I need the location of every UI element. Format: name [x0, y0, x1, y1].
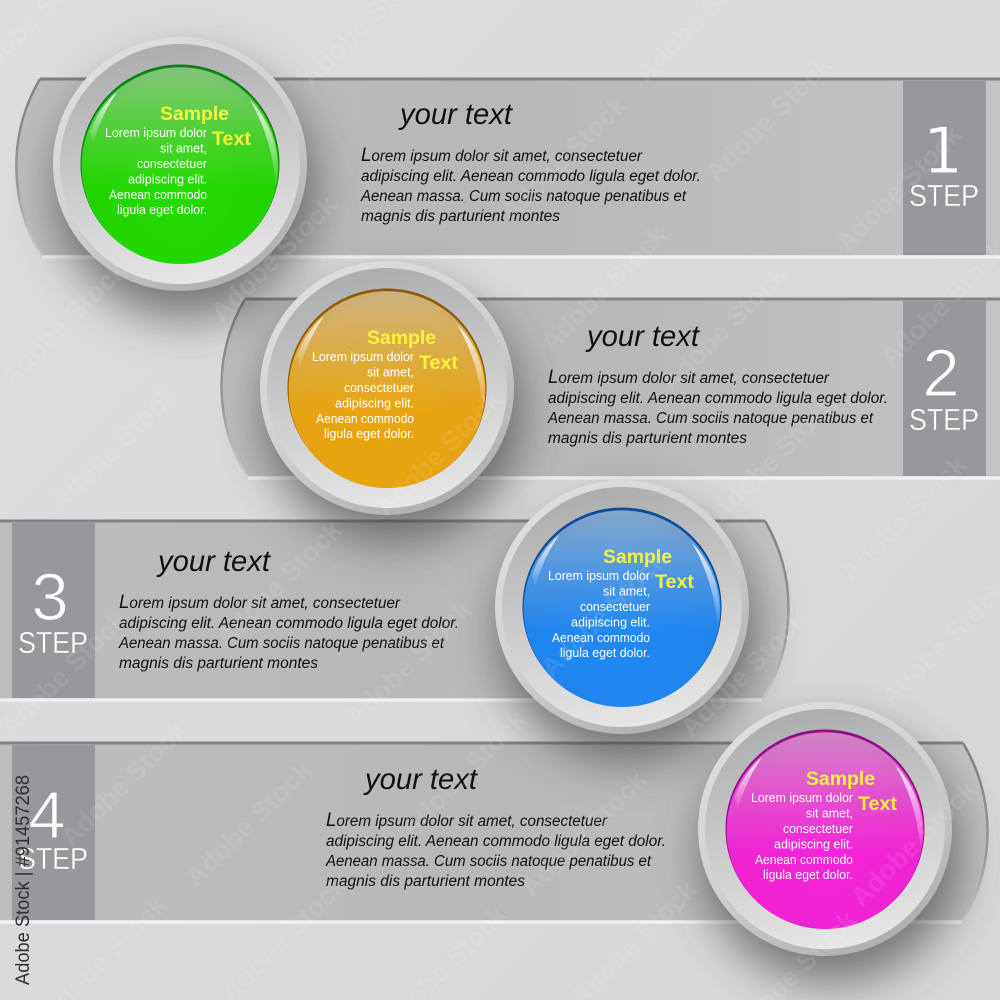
- text block 2: Lorem ipsum dolor sit amet, consectetuer: [548, 367, 830, 388]
- text block 4: Aenean massa. Cum sociis natoque penatibus et: [325, 853, 652, 870]
- stock watermarks: Adobe Stock: [205, 189, 343, 328]
- text block 1: magnis dis parturient montes: [361, 208, 560, 225]
- magenta glass button: consectetuer: [783, 821, 854, 836]
- blue glass button: Aenean commodo: [552, 630, 650, 645]
- orange glass button: Aenean commodo: [316, 411, 414, 426]
- stock watermarks: Adobe Stock: [700, 49, 838, 188]
- text block 1: Aenean massa. Cum sociis natoque penatibus et: [360, 188, 687, 205]
- green glass button: Text: [212, 129, 252, 150]
- text block 4: magnis dis parturient montes: [326, 873, 525, 890]
- blue glass button: Lorem ipsum dolor: [548, 568, 651, 583]
- stock watermarks: Adobe Stock: [210, 514, 348, 653]
- stock watermarks: Adobe Stock: [495, 89, 633, 228]
- text block 2: adipiscing elit. Aenean commodo ligula eget dolor.: [548, 390, 888, 407]
- stock watermarks: Adobe Stock: [370, 384, 508, 523]
- blue glass button: adipiscing elit.: [571, 614, 650, 630]
- stock watermarks: Adobe Stock: [675, 604, 813, 743]
- stock id caption: Adobe Stock | #91457268: [13, 775, 34, 985]
- blue glass button: sit amet,: [603, 584, 650, 598]
- step 3 label: [18, 560, 88, 660]
- step 4 label: STEP: [18, 841, 88, 876]
- text block 3: Aenean massa. Cum sociis natoque penatibus et: [118, 635, 445, 652]
- step 3 label: 3: [31, 560, 69, 635]
- text block 2: Aenean massa. Cum sociis natoque penatibus et: [547, 410, 874, 427]
- stock watermarks: Adobe Stock: [515, 764, 653, 903]
- orange glass button: ligula eget dolor.: [324, 426, 414, 441]
- stock watermarks: Adobe Stock: [340, 594, 478, 733]
- text block 4: your text: [363, 763, 479, 796]
- step 4 label: 4: [28, 778, 66, 853]
- magenta glass button: Text: [858, 794, 898, 815]
- magenta glass button: Sample: [806, 769, 875, 790]
- text block 4: adipiscing elit. Aenean commodo ligula eget dolor.: [326, 833, 666, 850]
- stock watermarks: Adobe Stock: [845, 774, 983, 913]
- blue glass button: Text: [655, 572, 695, 593]
- step 2 label: [909, 336, 979, 437]
- text block 2: [547, 320, 888, 447]
- step 2 label: 2: [922, 336, 960, 411]
- text block 3: magnis dis parturient montes: [119, 655, 318, 672]
- stock watermarks: Adobe Stock: [395, 704, 533, 843]
- orange glass button: sit amet,: [367, 364, 414, 380]
- stock watermarks: Adobe Stock: [835, 449, 973, 588]
- green glass button: Lorem ipsum dolor: [105, 125, 208, 140]
- blue glass button: ligula eget dolor.: [560, 645, 650, 660]
- step 4 label: [18, 778, 88, 876]
- band 3: [0, 521, 788, 700]
- orange glass button: Lorem ipsum dolor: [312, 349, 415, 364]
- text block 1: your text: [398, 98, 514, 131]
- blue glass button: consectetuer: [580, 599, 651, 614]
- stock watermarks: Adobe Stock: [830, 119, 968, 258]
- band 4: [0, 743, 987, 922]
- stock watermarks: Adobe Stock: [535, 219, 673, 358]
- magenta glass button: adipiscing elit.: [774, 836, 853, 852]
- stock watermarks: Adobe Stock: [705, 389, 843, 528]
- green glass button: sit amet,: [160, 140, 207, 156]
- magenta glass button: Lorem ipsum dolor: [751, 790, 854, 805]
- orange glass button: Text: [419, 353, 459, 374]
- step 1 label: STEP: [909, 178, 979, 213]
- stock watermarks: Adobe Stock: [55, 714, 193, 853]
- text block 3: adipiscing elit. Aenean commodo ligula eget dolor.: [119, 615, 459, 632]
- orange glass button: Sample: [367, 328, 436, 349]
- step 1 label: [909, 115, 979, 213]
- text block 4: [325, 763, 666, 890]
- text block 1: Lorem ipsum dolor sit amet, consectetuer: [361, 145, 643, 166]
- band 2: [222, 299, 1000, 478]
- text block 2: magnis dis parturient montes: [548, 430, 747, 447]
- text block 1: adipiscing elit. Aenean commodo ligula eget dolor.: [361, 168, 701, 185]
- green glass button: adipiscing elit.: [128, 172, 207, 186]
- text block 3: your text: [156, 545, 272, 578]
- step 1 box: [903, 81, 986, 255]
- green glass button: Aenean commodo: [109, 187, 207, 202]
- band 1: [16, 79, 1000, 257]
- green glass button: Sample: [160, 104, 229, 125]
- step 2 box: [903, 301, 986, 476]
- magenta glass button: [698, 702, 952, 956]
- step 1 label: 1: [923, 115, 963, 189]
- stock watermarks: Adobe Stock: [180, 754, 318, 893]
- step 3 label: STEP: [18, 625, 88, 660]
- blue glass button: [495, 480, 749, 734]
- orange glass button: adipiscing elit.: [335, 396, 414, 410]
- text block 3: [118, 545, 459, 672]
- orange glass button: [260, 261, 514, 515]
- text block 4: Lorem ipsum dolor sit amet, consectetuer: [326, 810, 608, 831]
- green glass button: [53, 37, 307, 291]
- stock watermarks: Adobe Stock: [45, 379, 183, 518]
- text block 2: your text: [585, 320, 701, 353]
- text block 3: Lorem ipsum dolor sit amet, consectetuer: [119, 592, 401, 613]
- green glass button: ligula eget dolor.: [117, 202, 207, 217]
- step 4 box: [12, 745, 95, 920]
- magenta glass button: Aenean commodo: [755, 852, 853, 867]
- green glass button: consectetuer: [137, 156, 208, 171]
- text block 1: [360, 98, 701, 225]
- step 3 box: [12, 523, 95, 698]
- orange glass button: consectetuer: [344, 380, 415, 395]
- step 2 label: STEP: [909, 402, 979, 437]
- magenta glass button: ligula eget dolor.: [763, 867, 853, 882]
- stock watermarks: Adobe Stock: [655, 259, 793, 398]
- blue glass button: Sample: [603, 547, 672, 568]
- stock watermarks: Adobe Stock: [535, 544, 673, 683]
- magenta glass button: sit amet,: [806, 806, 853, 820]
